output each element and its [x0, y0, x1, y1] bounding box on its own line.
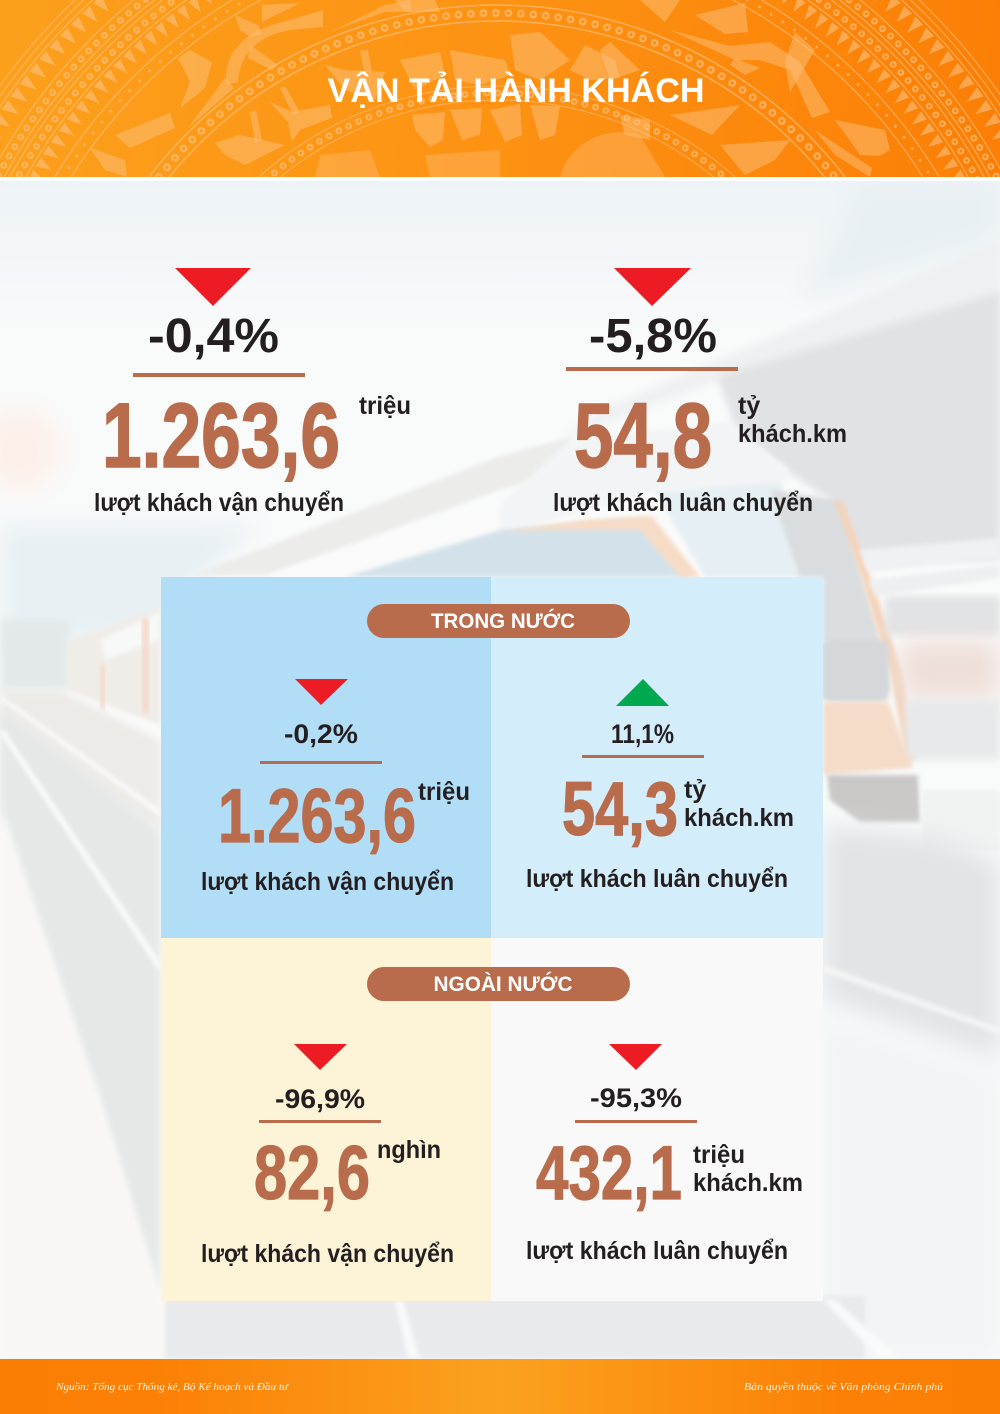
arrow down — [175, 268, 251, 306]
panel: domestic passengers — [161, 577, 491, 938]
arrow down — [294, 1044, 347, 1070]
label: lượt khách luân chuyển — [526, 1237, 788, 1265]
unit: triệu — [359, 392, 411, 420]
percent: -5,8% — [589, 310, 717, 363]
source: Nguồn: Tổng cục Thống kê, Bộ Kế hoạch và Đầu tư — [55, 1381, 289, 1393]
percent: -0,4% — [148, 310, 279, 363]
heading pill: domestic: TRONG NƯỚC — [431, 609, 575, 633]
label: lượt khách vận chuyển — [94, 489, 344, 517]
panel: domestic passenger-km — [491, 577, 823, 938]
arrow down — [295, 679, 348, 705]
arrow up — [616, 679, 669, 706]
arrow down — [609, 1044, 662, 1070]
divider — [575, 1120, 697, 1123]
label: lượt khách vận chuyển — [201, 868, 454, 896]
divider — [259, 1120, 381, 1123]
title: VẬN TẢI HÀNH KHÁCH — [328, 72, 704, 110]
unit: tỷ — [684, 776, 706, 804]
percent: -96,9% — [275, 1084, 365, 1114]
unit line 2: khách.km — [684, 804, 794, 832]
value: 54,3 — [562, 767, 678, 852]
arrow down — [614, 268, 691, 306]
unit: tỷ — [738, 392, 760, 420]
label: lượt khách luân chuyển — [553, 489, 813, 517]
percent: -0,2% — [284, 719, 358, 749]
value: 1.263,6 — [102, 385, 340, 487]
unit: nghìn — [377, 1136, 441, 1164]
value: 1.263,6 — [218, 774, 416, 859]
triangle band inner — [30, 0, 964, 177]
divider — [260, 761, 382, 764]
stat: top left — [94, 268, 411, 517]
heading pill: international: NGOÀI NƯỚC — [434, 972, 572, 996]
percent: -95,3% — [590, 1083, 682, 1113]
unit: triệu — [693, 1141, 745, 1169]
percent: 11,1% — [611, 719, 674, 749]
divider — [133, 373, 305, 377]
header banner — [0, 0, 1000, 177]
footer — [0, 1359, 1000, 1414]
heading pill: international — [367, 967, 630, 1001]
bronze drum pattern — [0, 0, 1000, 177]
panel: international passengers — [161, 938, 491, 1301]
label: lượt khách vận chuyển — [201, 1240, 454, 1268]
value: 54,8 — [574, 385, 712, 487]
value: 432,1 — [536, 1131, 682, 1216]
value: 82,6 — [254, 1131, 370, 1216]
birds and animals — [90, 0, 890, 177]
stat: top right — [553, 268, 847, 517]
panel: international passenger-km — [491, 938, 823, 1301]
unit: triệu — [418, 778, 470, 806]
copyright: Bản quyền thuộc về Văn phòng Chính phủ — [744, 1381, 944, 1393]
divider — [566, 367, 738, 371]
label: lượt khách luân chuyển — [526, 865, 788, 893]
unit line 2: khách.km — [738, 420, 847, 448]
triangle band outer — [0, 0, 1000, 140]
heading pill: domestic — [367, 604, 630, 638]
divider — [582, 755, 704, 758]
unit line 2: khách.km — [693, 1169, 803, 1197]
